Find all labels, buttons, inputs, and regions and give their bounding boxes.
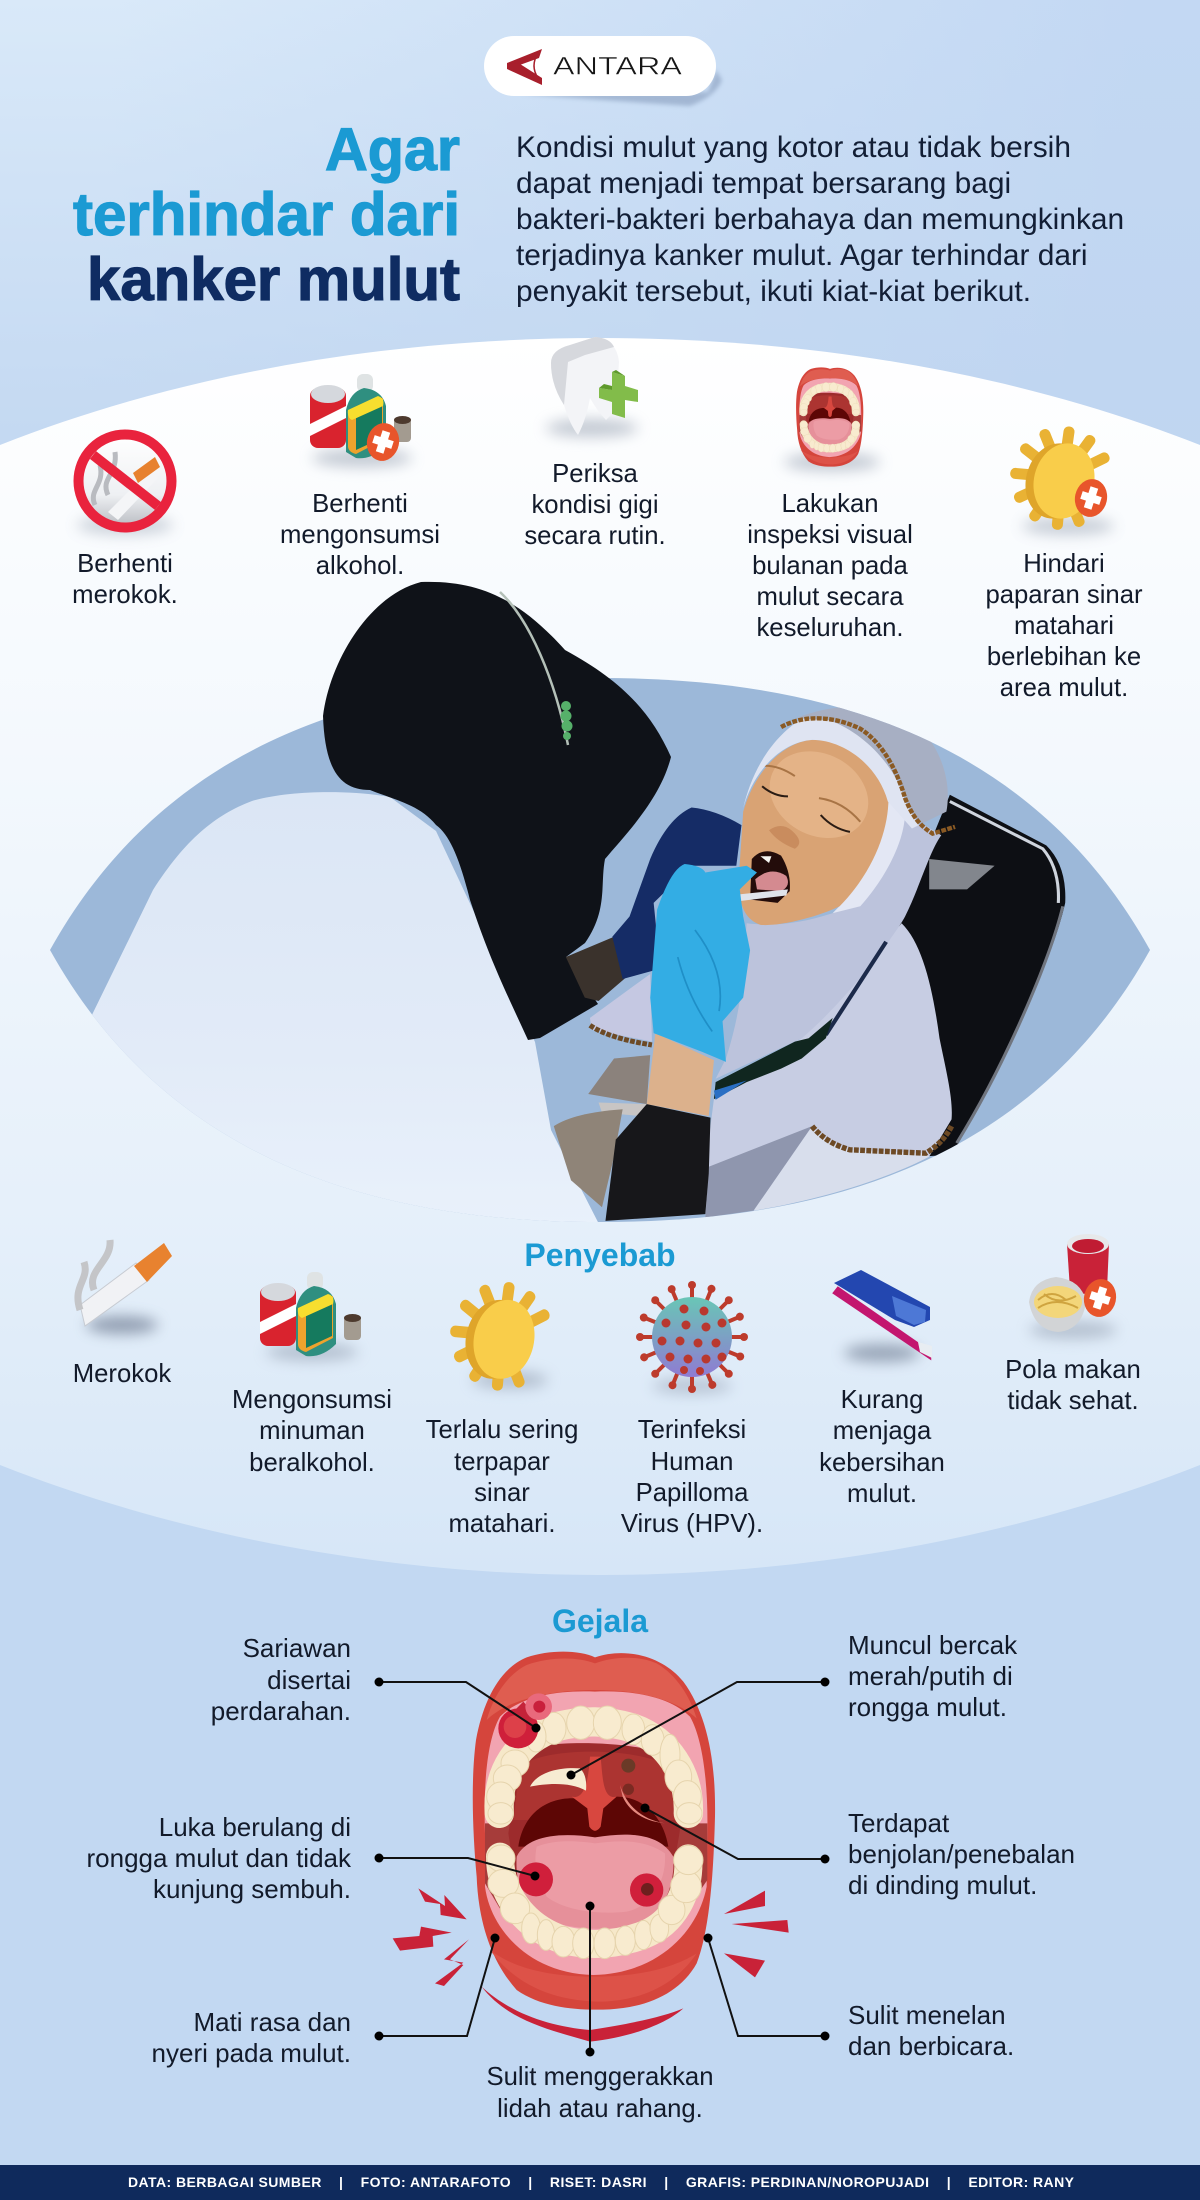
cause: sun exposure: sinar [474, 1479, 530, 1507]
symptom: recurring wounds: rongga mulut dan tidak [86, 1843, 352, 1873]
symptom: lumps or thickening: di dinding mulut. [848, 1870, 1037, 1900]
logo [484, 36, 722, 106]
intro paragraph: penyakit tersebut, ikuti kiat-kiat berikut. [516, 275, 1031, 308]
cause: sun exposure: Terlalu sering [426, 1416, 578, 1444]
symptom: difficulty swallowing and speaking: dan berbicara. [848, 2031, 1014, 2061]
child's face [738, 734, 888, 925]
symptom: numbness and pain: Mati rasa dan [193, 2007, 351, 2037]
tip: dental check: Periksa [552, 460, 639, 488]
nurse bead chain [500, 592, 572, 745]
tip: stop smoking [72, 434, 178, 609]
intro paragraph: terjadinya kanker mulut. Agar terhindar dari [516, 239, 1088, 272]
tip: avoid sun: Hindari [1023, 550, 1105, 578]
forearm [647, 1033, 714, 1116]
hijab dome [795, 706, 948, 825]
brown bag strap [566, 937, 626, 1001]
symptom: red or white patches [848, 1630, 1018, 1722]
tip: avoid sun [985, 426, 1143, 702]
cause: poor oral hygiene: menjaga [833, 1417, 932, 1445]
cause: unhealthy diet: Pola makan [1005, 1356, 1141, 1384]
symptom: canker sores with bleeding: disertai [267, 1665, 351, 1695]
cause: poor oral hygiene: mulut. [847, 1480, 917, 1508]
cause: HPV virus [621, 1281, 763, 1538]
symptom: red or white patches: rongga mulut. [848, 1692, 1007, 1722]
tip: stop alcohol: Berhenti [312, 490, 408, 518]
cause: sun exposure: terpapar [454, 1448, 550, 1476]
tip: visual inspection: keseluruhan. [756, 614, 904, 642]
tip: visual inspection: bulanan pada [752, 552, 909, 580]
symptom: difficulty swallowing and speaking [848, 2000, 1014, 2061]
cause: sun exposure: matahari. [448, 1510, 556, 1538]
symptom: difficulty moving tongue or jaw [486, 2063, 714, 2123]
heading: symptoms: Gejala [552, 1603, 648, 1639]
black sleeve [605, 1104, 710, 1221]
tip: visual inspection: Lakukan [781, 490, 879, 518]
title: kanker mulut [87, 246, 460, 313]
tip: visual inspection: inspeksi visual [747, 521, 913, 549]
symptom: difficulty moving tongue or jaw: lidah atau rahang. [497, 2095, 703, 2123]
pain marks and lip scratch [393, 1888, 789, 2042]
cause: HPV virus: Human [651, 1448, 733, 1476]
symptom: recurring wounds: Luka berulang di [159, 1812, 351, 1842]
cause: HPV virus: Papilloma [636, 1479, 749, 1507]
chair [898, 795, 1065, 1157]
title [73, 116, 460, 313]
cause: HPV virus: Virus (HPV). [621, 1510, 763, 1538]
intro paragraph: dapat menjadi tempat bersarang bagi [516, 167, 1011, 200]
hijab drape [716, 812, 941, 1079]
symptom: difficulty swallowing and speaking: Sulit menelan [848, 2000, 1006, 2030]
symptom: numbness and pain: nyeri pada mulut. [152, 2038, 351, 2068]
photo: dental examination [50, 582, 1150, 1230]
symptom: numbness and pain [152, 2007, 351, 2068]
pointer lines [374, 1678, 830, 2056]
child and chair [554, 706, 1065, 1221]
cause: alcohol: beralkohol. [249, 1449, 375, 1477]
cause: smoking: Merokok [73, 1360, 171, 1388]
tip: avoid sun: paparan sinar [985, 581, 1143, 609]
cause: poor oral hygiene: Kurang [841, 1386, 923, 1414]
tip: dental check: kondisi gigi [531, 491, 659, 519]
hijab inner band [743, 719, 919, 829]
symptom: canker sores with bleeding: perdarahan. [211, 1696, 351, 1726]
cause: alcohol [232, 1272, 392, 1477]
lower background band [0, 1400, 1200, 2200]
dark spots [620, 1759, 665, 1823]
cause: poor oral hygiene [819, 1270, 945, 1508]
tip: stop alcohol: alkohol. [316, 552, 404, 580]
lanyard [714, 942, 886, 1100]
tip: dental check: secara rutin. [524, 522, 666, 550]
bright blue glove [650, 864, 757, 1062]
tip: stop smoking: merokok. [72, 581, 178, 609]
tip: stop alcohol [280, 374, 440, 580]
mouth diagram [473, 1652, 715, 2010]
tip: visual inspection [747, 367, 913, 642]
heading: causes: Penyebab [524, 1237, 676, 1273]
title: terhindar dari [73, 181, 460, 248]
cause: unhealthy diet: tidak sehat. [1007, 1387, 1139, 1415]
hijab trim [781, 718, 955, 834]
symptom: lumps or thickening: benjolan/penebalan [848, 1839, 1075, 1869]
uniform trim [812, 1126, 952, 1153]
tip: stop smoking: Berhenti [77, 550, 173, 578]
symptom: recurring wounds: kunjung sembuh. [153, 1874, 351, 1904]
title: Agar [325, 116, 460, 183]
tip: avoid sun: matahari [1014, 612, 1114, 640]
cause: alcohol: minuman [259, 1417, 365, 1445]
nurse coat [60, 792, 602, 1230]
cause: sun exposure [426, 1281, 578, 1538]
sores on gum [498, 1693, 552, 1748]
navy glove [612, 808, 741, 979]
cause: smoking [73, 1240, 172, 1388]
symptom: lumps or thickening [848, 1808, 1075, 1900]
intro paragraph: Kondisi mulut yang kotor atau tidak bersih [516, 131, 1071, 164]
hijab side strip [833, 802, 904, 913]
uniform [705, 923, 952, 1217]
cause: poor oral hygiene: kebersihan [819, 1449, 945, 1477]
cause: HPV virus: Terinfeksi [638, 1416, 746, 1444]
symptom: canker sores with bleeding: Sariawan [243, 1633, 351, 1663]
tip: dental check [524, 337, 666, 550]
logo: ANTARA [553, 52, 682, 80]
tip: stop alcohol: mengonsumsi [280, 521, 440, 549]
tip: avoid sun: berlebihan ke [987, 643, 1141, 671]
tongue sores [519, 1862, 663, 1907]
cause: unhealthy diet [1005, 1234, 1141, 1415]
nurse hijab [323, 582, 671, 1040]
symptom: lumps or thickening: Terdapat [848, 1808, 950, 1838]
symptom: red or white patches: merah/putih di [848, 1661, 1013, 1691]
panel: central eye shape [0, 338, 1200, 1575]
tip: visual inspection: mulut secara [756, 583, 904, 611]
uniform lower hem [754, 1126, 929, 1211]
intro paragraph: bakteri-bakteri berbahaya dan memungkinkan [516, 203, 1124, 236]
footer credits bar [0, 2165, 1200, 2200]
footer credits bar: DATA: BERBAGAI SUMBER | FOTO: ANTARAFOTO | RISET: DASRI | GRAFIS: PERDINAN/NOROPUJADI | EDITOR: RANY [128, 2174, 1075, 2190]
symptom: recurring wounds [86, 1812, 352, 1904]
intro paragraph [516, 131, 1124, 308]
child's legs [554, 1055, 650, 1207]
cause: alcohol: Mengonsumsi [232, 1386, 392, 1414]
symptom: difficulty moving tongue or jaw: Sulit menggerakkan [486, 2063, 714, 2091]
symptom: red or white patches: Muncul bercak [848, 1630, 1018, 1660]
child's sleeve [590, 974, 652, 1042]
tip: avoid sun: area mulut. [1000, 674, 1128, 702]
white patch [530, 1768, 586, 1791]
symptom: canker sores with bleeding [211, 1633, 351, 1726]
